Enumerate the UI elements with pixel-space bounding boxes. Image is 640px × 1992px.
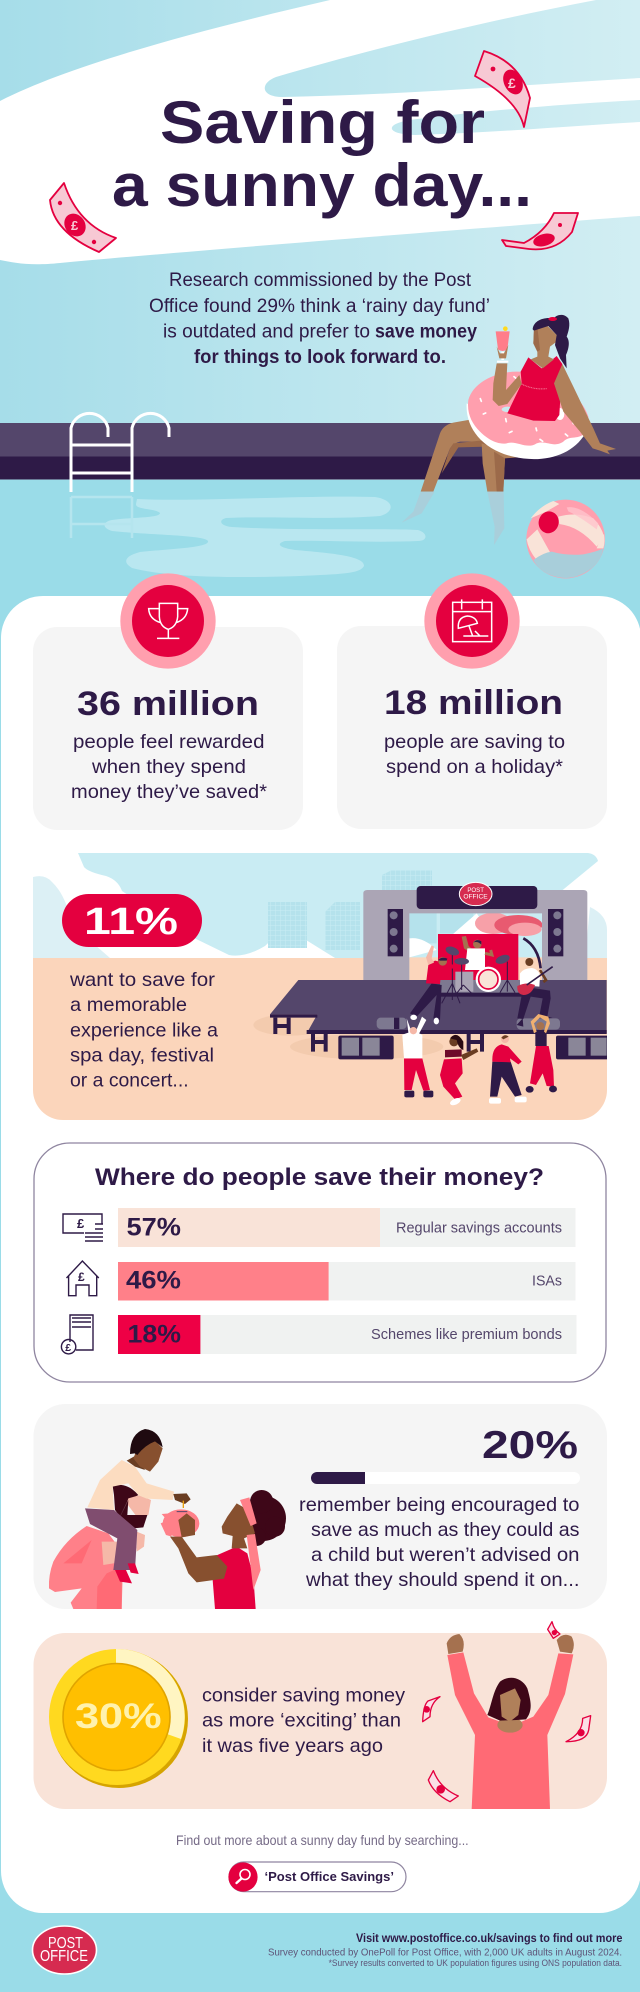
title — [112, 89, 532, 219]
face — [500, 1688, 521, 1722]
panel: concert 11% — [33, 853, 607, 1120]
father — [49, 1485, 151, 1609]
text: exciting: consider saving money — [202, 1685, 405, 1707]
stat: 36 million: 36 million — [77, 685, 259, 723]
guitarist — [517, 958, 553, 1027]
hair — [533, 315, 569, 368]
text: encouraged as a child: save as much as they could as — [311, 1519, 580, 1541]
panel: 30% exciting — [34, 1622, 607, 1809]
illustration: family with piggy bank — [49, 1429, 286, 1609]
bar: regular savings — [118, 1208, 576, 1247]
falling bills — [423, 1622, 591, 1802]
icon: calendar badge — [424, 573, 520, 669]
text: rewarded: when they spend — [91, 756, 246, 778]
title: a sunny day... — [112, 152, 532, 219]
text: encouraged as a child: what they should spend it on... — [305, 1569, 580, 1591]
bar: regular savings: 57% — [126, 1214, 181, 1242]
intro text — [149, 270, 490, 368]
icon: money bill top right — [475, 51, 530, 127]
icon: house: £ — [78, 1270, 85, 1284]
icon: money bill lower right — [502, 213, 578, 249]
heading: Where do people save their money? — [95, 1164, 544, 1191]
text: encouraged as a child: remember being encouraged to — [299, 1494, 580, 1516]
intro text: Research commissioned by the Post — [169, 270, 472, 291]
text: exciting: it was five years ago — [202, 1735, 383, 1757]
text: holiday: spend on a holiday* — [386, 756, 563, 778]
badge: 11%: 11% — [84, 901, 178, 943]
text: encouraged as a child: a child but weren’t advised on — [311, 1544, 580, 1566]
panel: sky header — [0, 0, 640, 480]
text: rewarded: money they’ve saved* — [71, 781, 267, 803]
text: find out more: Find out more about a sunny day fund by searching... — [176, 1832, 469, 1848]
panel: where people save — [34, 1143, 606, 1382]
water ripples — [104, 497, 426, 577]
icon: banknote — [63, 1214, 103, 1241]
chart: coin 30%: 30% — [75, 1697, 162, 1736]
text: memorable experience: a memorable — [70, 994, 187, 1016]
badge: 11% — [62, 894, 202, 947]
text: holiday — [384, 731, 565, 778]
search pill — [228, 1862, 406, 1892]
fists — [447, 1634, 574, 1654]
sweater — [447, 1652, 573, 1809]
icon: trophy badge — [120, 573, 216, 669]
legs — [402, 419, 527, 545]
chart: coin 30% — [49, 1649, 188, 1788]
logo: Post Office — [32, 1926, 96, 1974]
progress bar — [311, 1472, 580, 1484]
speakers and amps — [338, 909, 609, 1059]
text: holiday: people are saving to — [384, 731, 565, 753]
icon: bond document — [61, 1315, 93, 1354]
text: exciting: as more ‘exciting’ than — [202, 1710, 401, 1732]
icon: money bill left: £ — [71, 218, 79, 233]
intro text: Office found 29% think a ‘rainy day fund’ — [149, 296, 490, 317]
neck — [497, 1717, 523, 1733]
text: memorable experience: spa day, festival — [70, 1044, 214, 1066]
bar: premium bonds — [118, 1315, 576, 1354]
icon: magnifier — [228, 1862, 258, 1892]
text: rewarded — [71, 731, 267, 803]
banner with logo: OFFICE — [463, 893, 488, 900]
bar: ISAs: 46% — [126, 1267, 181, 1295]
panel: 20% encouraged — [34, 1404, 607, 1609]
panel: pool wall — [0, 423, 640, 480]
bar: premium bonds: Schemes like premium bonds — [371, 1326, 562, 1343]
banner with logo — [417, 882, 537, 909]
footer text: Visit www.postoffice.co.uk/savings to find out more — [356, 1933, 622, 1945]
panel: 36 million card — [33, 627, 303, 830]
intro text: save money — [375, 322, 477, 342]
hair — [487, 1678, 531, 1721]
illustration: woman on donut float — [402, 315, 616, 545]
bar: premium bonds: 18% — [128, 1321, 181, 1349]
crowd person dark trousers — [489, 1035, 527, 1104]
stat: 18 million: 18 million — [384, 684, 563, 722]
crowd person red trousers — [440, 1035, 478, 1107]
text: rewarded: people feel rewarded — [73, 731, 264, 753]
screen and drum kit — [438, 934, 523, 1003]
bar: ISAs: ISAs — [532, 1273, 562, 1290]
search pill: ‘Post Office Savings’ — [264, 1869, 394, 1884]
illustration: celebrating woman — [423, 1622, 591, 1809]
stage deck — [270, 980, 607, 1052]
singer — [410, 945, 455, 1024]
icon: house — [66, 1261, 99, 1296]
bar: regular savings: Regular savings accounts — [396, 1220, 562, 1237]
child — [85, 1429, 191, 1583]
title: Saving for — [160, 89, 485, 156]
banner with logo: POST — [467, 887, 484, 894]
logo: Post Office: OFFICE — [40, 1948, 88, 1965]
illustration: concert stage — [253, 882, 609, 1107]
icon: money bill top right: £ — [508, 75, 516, 91]
panel: main white card — [1, 596, 640, 1913]
text: memorable experience: or a concert... — [70, 1069, 189, 1091]
icon: pool ladder — [71, 413, 169, 538]
intro text: is outdated and prefer to — [163, 322, 370, 342]
icon: banknote: £ — [77, 1216, 85, 1231]
crowd person white top — [402, 1017, 433, 1097]
bar: ISAs — [118, 1262, 576, 1300]
donut float — [467, 372, 588, 459]
icon: money bill left — [50, 183, 116, 252]
logo: Post Office: POST — [48, 1935, 83, 1952]
icon: beach ball — [526, 500, 605, 578]
icon: bond document: £ — [65, 1342, 71, 1354]
text: encouraged as a child — [299, 1494, 580, 1591]
crowd person arms raised — [526, 1014, 557, 1093]
text: memorable experience: want to save for — [69, 969, 216, 991]
piggy bank — [161, 1509, 199, 1537]
stage truss — [363, 890, 588, 980]
cocktail — [496, 326, 510, 363]
head and neck — [531, 325, 557, 368]
red top — [507, 356, 562, 421]
mother — [170, 1490, 286, 1609]
text: memorable experience — [69, 969, 218, 1091]
footer text — [268, 1933, 622, 1968]
arms — [554, 364, 616, 454]
intro text: for things to look forward to. — [194, 347, 446, 368]
text: exciting — [202, 1685, 405, 1757]
panel: 18 million card — [337, 626, 607, 829]
text: memorable experience: experience like a — [70, 1019, 218, 1041]
footer text: *Survey results converted to UK population figures using ONS population data. — [329, 1958, 622, 1968]
stat: 20%: 20% — [482, 1424, 578, 1467]
